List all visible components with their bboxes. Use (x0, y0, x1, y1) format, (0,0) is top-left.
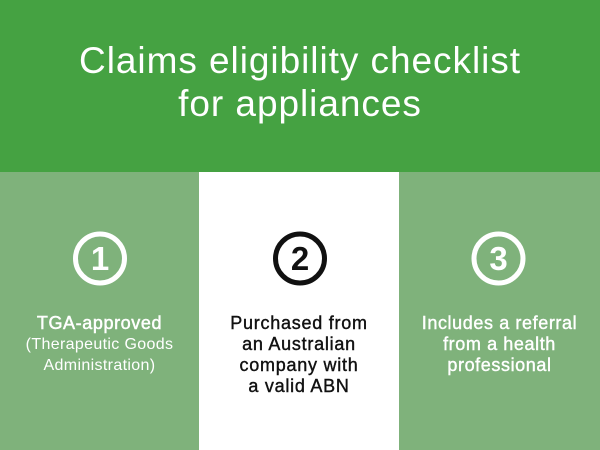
icon: number 1 (73, 232, 127, 286)
text: TGA-approved: Administration) (44, 357, 155, 374)
panel: step 1 (0, 172, 199, 450)
text: includes a referral (422, 313, 577, 376)
panel: step 2 (199, 172, 399, 450)
header banner (0, 0, 600, 172)
icon: number 2 (273, 232, 327, 286)
text: includes a referral: Includes a referral (422, 313, 577, 333)
title (79, 40, 521, 124)
title: for appliances (178, 83, 422, 124)
title: Claims eligibility checklist (79, 40, 521, 81)
icon: number 3 (472, 232, 526, 286)
panel: step 3 (399, 172, 600, 450)
text: includes a referral: professional (447, 355, 552, 375)
text: purchased from: an Australian (242, 334, 356, 354)
icon: number 1: 1 (91, 240, 109, 277)
text: purchased from: company with (239, 355, 359, 375)
text: purchased from (230, 313, 368, 396)
text: TGA-approved: (Therapeutic Goods (26, 336, 173, 353)
text: purchased from: a valid ABN (248, 376, 350, 396)
text: includes a referral: from a health (443, 334, 556, 354)
icon: number 2: 2 (291, 240, 309, 277)
text: purchased from: Purchased from (230, 313, 368, 333)
text: TGA-approved (26, 313, 173, 374)
icon: number 3: 3 (489, 240, 508, 277)
text: TGA-approved: TGA-approved (37, 313, 162, 333)
